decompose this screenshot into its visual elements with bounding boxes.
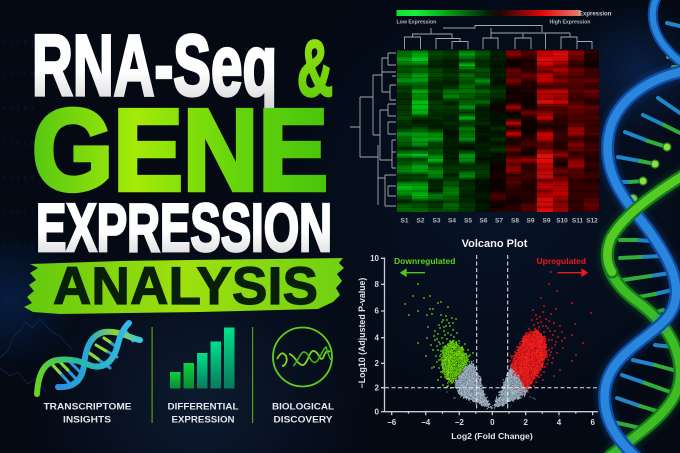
title	[32, 18, 333, 266]
heatmap sample labels: S12	[586, 218, 598, 224]
background binary data texture: 1 0 0 1 1	[2, 210, 35, 217]
rungs blue portion	[615, 23, 680, 406]
icon: transcriptome DNA	[37, 323, 140, 394]
heatmap sample labels: S9	[543, 218, 551, 224]
x tick labels: −6	[387, 418, 397, 427]
large DNA helix	[605, 0, 680, 453]
x tick labels: −2	[455, 418, 464, 427]
background binary data texture: 1 0 1 1 0	[2, 70, 35, 77]
downregulated label: Downregulated	[394, 256, 455, 266]
heatmap sample labels: S8	[511, 218, 519, 224]
high label: High Expression	[550, 20, 590, 26]
x tick labels: 6	[590, 418, 595, 427]
volcano plot title: Volcano Plot	[462, 238, 528, 250]
x tick labels	[387, 418, 595, 427]
title line: EXPRESSION: EXPRESSION	[36, 190, 332, 266]
background binary data texture: 1 1 0 1 0	[2, 140, 35, 147]
title line: GENE: GENE	[32, 85, 328, 215]
low label: Low Expression	[396, 20, 436, 26]
heatmap sample labels: S11	[572, 218, 583, 224]
DNA strand blue	[58, 332, 140, 387]
faint points below threshold	[447, 392, 535, 399]
y tick labels: 6	[375, 307, 380, 316]
threshold dashed lines	[385, 255, 602, 411]
rungs green portion	[613, 57, 680, 428]
x tick labels: 4	[557, 418, 562, 427]
icon labels	[44, 402, 334, 424]
red upregulated cluster	[511, 329, 548, 390]
heatmap sample labels: S10	[556, 218, 568, 224]
heatmap left dendrogram	[350, 53, 396, 206]
heatmap sample labels	[401, 218, 598, 224]
heatmap sample labels: S2	[417, 218, 425, 224]
y tick labels: 10	[370, 254, 380, 263]
x tick labels: −4	[421, 418, 431, 427]
green strand overlap	[607, 175, 680, 272]
icon: differential bars	[170, 328, 234, 388]
x tick labels: 2	[523, 418, 528, 427]
label: expression: EXPRESSION	[172, 414, 235, 424]
DNA rungs	[50, 330, 133, 386]
heatmap sample labels: S1	[401, 218, 409, 224]
axes	[381, 258, 598, 415]
brush stroke	[24, 258, 344, 314]
x axis title: Log2 (Fold Change)	[451, 431, 533, 441]
blue strand upper	[653, 0, 680, 64]
label: differential: DIFFERENTIAL	[168, 402, 239, 412]
y tick labels	[370, 254, 380, 416]
green downregulated cluster	[440, 340, 470, 384]
green scatter points	[405, 284, 473, 388]
y tick labels: 8	[375, 280, 380, 289]
icon: biological discovery circle	[273, 328, 332, 386]
grey non-significant points	[454, 361, 492, 409]
divider	[152, 327, 153, 423]
DNA strand green	[37, 323, 129, 394]
heatmap	[397, 50, 599, 212]
upregulated arrow	[558, 270, 587, 276]
colour scale bar	[396, 10, 580, 16]
legend title: Expression	[579, 12, 612, 18]
y tick labels: 0	[375, 408, 380, 416]
banner text: ANALYSIS	[53, 257, 318, 316]
y tick labels: 4	[375, 334, 380, 342]
heatmap sample labels: S4	[448, 218, 456, 224]
divider	[252, 327, 253, 423]
background binary data texture: 0 1 0 0 1	[2, 40, 35, 47]
heatmap sample labels: S6	[480, 218, 488, 224]
background binary data texture: 0 1 1 0 0	[2, 175, 35, 182]
heatmap sample labels: S9	[527, 218, 535, 224]
upregulated label: Upregulated	[536, 256, 586, 266]
heatmap sample labels: S7	[495, 218, 503, 224]
background binary data texture: 0 0 1 0 1	[2, 105, 35, 112]
label: biological: BIOLOGICAL	[272, 402, 334, 412]
x tick labels: 0	[490, 418, 495, 427]
red scatter points	[508, 272, 591, 393]
background binary data texture: 0 1 0 1 0	[2, 245, 35, 252]
heatmap sample labels: S3	[433, 218, 441, 224]
y tick labels: 2	[375, 384, 380, 392]
downregulated arrow	[401, 270, 425, 276]
background faint line chart	[0, 319, 72, 392]
wave strands	[277, 351, 330, 366]
background binary data texture	[2, 40, 35, 252]
brush banner: analysis	[24, 257, 344, 316]
heatmap legend	[396, 10, 612, 26]
heatmap top dendrogram	[404, 26, 592, 49]
label: discovery: DISCOVERY	[274, 414, 333, 424]
title line: RNA-Seq: RNA-Seq	[32, 18, 277, 114]
heatmap row separators	[397, 50, 599, 212]
volcano plot	[357, 254, 602, 441]
y axis title: −Log10 (Adjusted P-value)	[357, 278, 367, 388]
label: insights: INSIGHTS	[63, 414, 111, 424]
blue strand main	[605, 71, 680, 453]
heatmap sample labels: S5	[464, 218, 472, 224]
green strand main	[607, 175, 680, 453]
y tick labels: 2	[375, 359, 380, 368]
rung end balls	[628, 143, 671, 204]
title ampersand: &	[297, 24, 333, 112]
label: transcriptome: TRANSCRIPTOME	[44, 402, 132, 412]
